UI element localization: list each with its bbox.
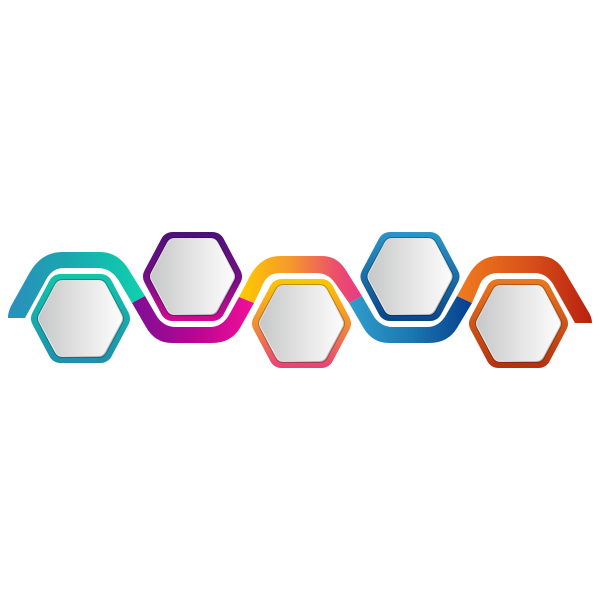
ribbon: orange to red segment [457,256,592,323]
hexagon 5: orange to red [482,292,556,356]
ribbon: purple segment [132,296,254,343]
hexagon 1: teal [44,286,118,350]
hexagon 3: yellow to pink [264,292,338,356]
ribbon: yellow to pink segment [239,256,362,303]
ribbon: teal segment [8,252,145,318]
hexagon 2: purple [156,244,230,308]
hexagon 4: blue [373,244,447,308]
ribbon: blue segment [349,296,472,343]
